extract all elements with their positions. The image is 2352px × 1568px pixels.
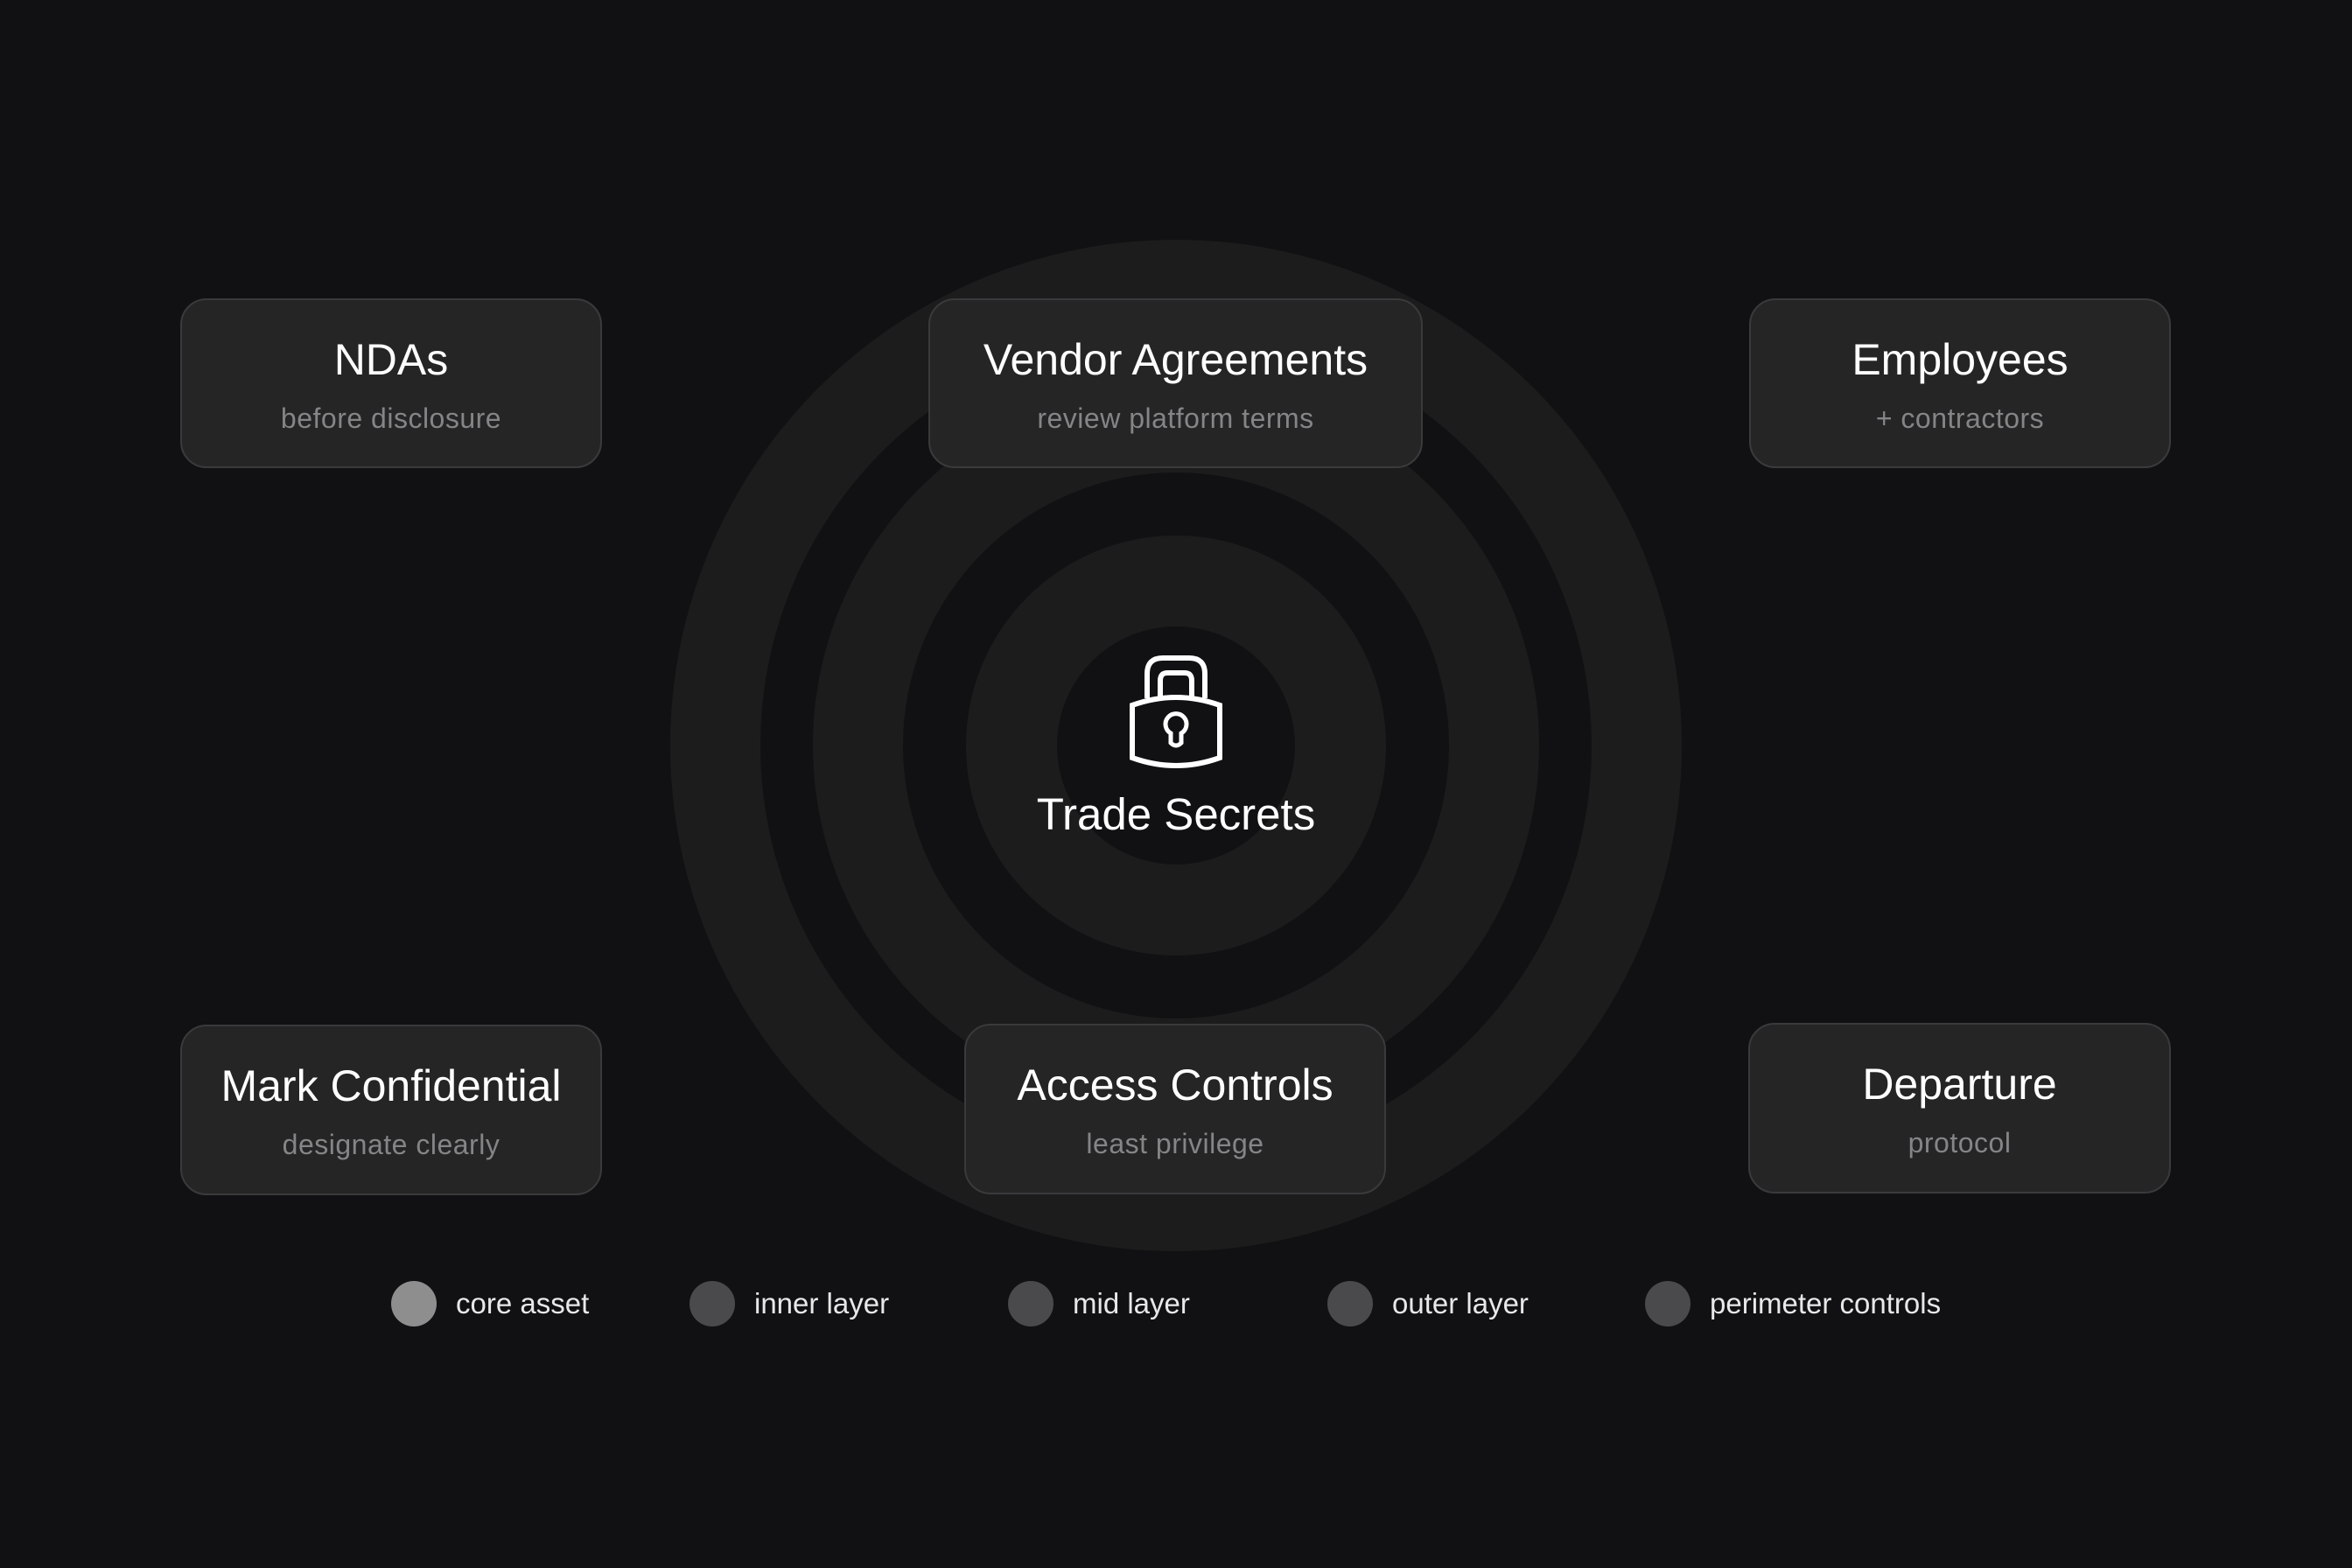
card: Departure: protocol [1908,1127,2011,1158]
card: Access Controls: least privilege [1086,1128,1264,1159]
card: Access Controls [964,1024,1386,1194]
card: Vendor Agreements: Vendor Agreements [984,335,1368,384]
card: Mark Confidential [180,1025,602,1195]
card: Mark Confidential: designate clearly [283,1129,500,1160]
card: Access Controls: Access Controls [1017,1060,1334,1110]
legend: core asset [456,1287,589,1320]
card: NDAs: NDAs [334,335,448,384]
icon: lock [1130,655,1222,768]
legend: inner layer [754,1287,889,1320]
card: NDAs: before disclosure [281,402,501,434]
legend: perimeter controls [1645,1281,1941,1326]
legend [391,1281,1941,1326]
card: Departure [1748,1023,2171,1194]
legend: outer layer [1392,1287,1529,1320]
card: NDAs [180,298,602,468]
card: Vendor Agreements [928,298,1423,468]
legend: mid layer [1073,1287,1190,1320]
legend: perimeter controls [1710,1287,1941,1320]
legend: outer layer [1327,1281,1529,1326]
legend: core asset [391,1281,590,1326]
card: Vendor Agreements: review platform terms [1037,402,1314,434]
center label: Trade Secrets [1037,789,1315,839]
legend: mid layer [1008,1281,1190,1326]
card: Employees [1749,298,2171,468]
card: Mark Confidential: Mark Confidential [220,1061,562,1110]
card: Employees: Employees [1852,335,2068,384]
card: Employees: + contractors [1876,402,2044,434]
legend: inner layer [690,1281,889,1326]
card: Departure: Departure [1862,1060,2057,1109]
